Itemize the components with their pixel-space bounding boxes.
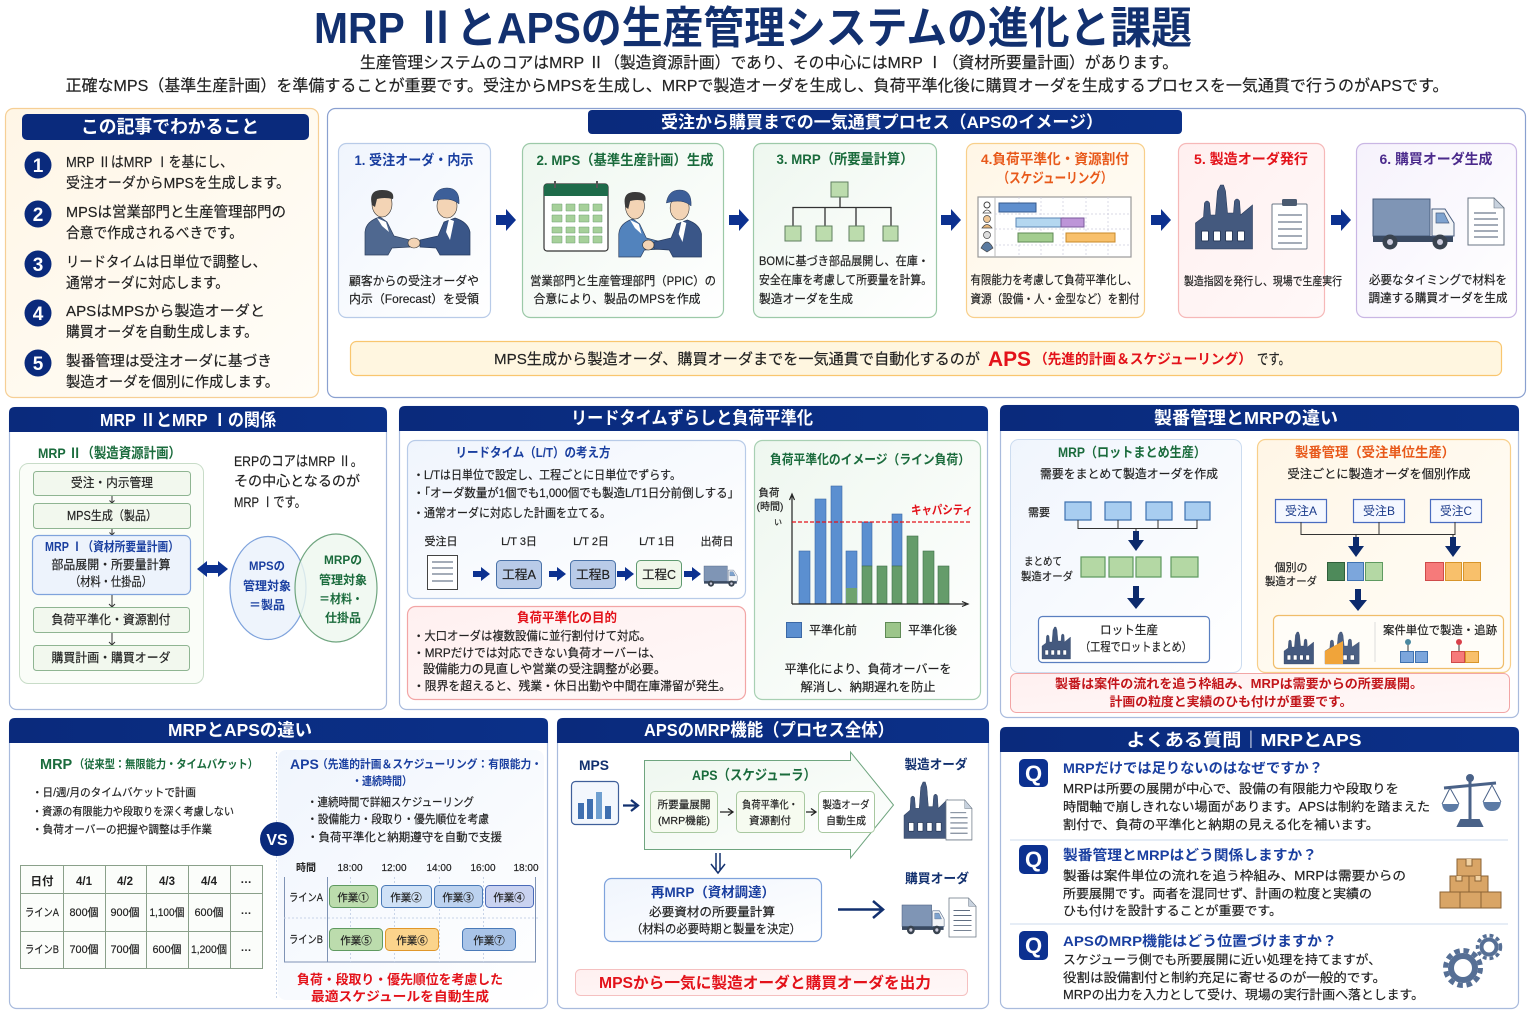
timeline: 工程B	[576, 567, 610, 582]
callout: 製番: 製番は案件の流れを追う枠組み、MRPは需要からの所要展開。	[1055, 676, 1423, 691]
block arrow: APS scheduler: 所要量展開	[658, 798, 710, 811]
icon: document	[1468, 198, 1504, 245]
heading: 一気通貫プロセス	[588, 110, 1182, 134]
box: MRP I: 部品展開・所要量計算	[52, 557, 170, 572]
column: APS: 負荷・段取り・優先順位を考慮した	[297, 972, 503, 987]
item 5: 5	[33, 354, 44, 375]
panel: APSのMRP機能: 製造オーダ	[904, 757, 968, 772]
heading	[1000, 727, 1519, 752]
box: 製番管理: 受注ごとに製造オーダを個別作成	[1288, 466, 1470, 481]
venn: MPS / MRP	[230, 534, 377, 642]
panel: MRPとAPSの違い	[9, 718, 548, 1008]
card 2: MPS生成	[522, 144, 724, 318]
FAQ 2: 所要展開です。両者を混同せず、計画の粒度と実績の	[1063, 886, 1372, 901]
banner: APS: （先進的計画＆スケジューリング）	[1034, 351, 1252, 367]
stack: MRP II: 負荷平準化・資源割付	[52, 612, 170, 627]
icon: factory + document	[904, 782, 972, 840]
timeline	[424, 535, 737, 590]
card 1: 受注オーダ・内示: 1. 受注オーダ・内示	[354, 152, 474, 168]
box: 製番管理: 製造オーダ	[1265, 574, 1317, 588]
item 3: 3	[33, 255, 43, 276]
venn: MPS / MRP: MPSの	[249, 559, 285, 573]
note: ERP: その中心となるのが	[234, 473, 360, 489]
box: MRP I: MRP Ⅰ（資材所要量計画）	[45, 539, 179, 554]
panel: APSのMRP機能	[557, 718, 989, 1008]
block arrow: APS scheduler: 資源割付	[749, 814, 791, 827]
gantt chart: 作業③	[442, 891, 474, 904]
icon: calendar	[544, 181, 608, 251]
column: APS: ・連続時間）	[352, 774, 412, 788]
card 6: 購買オーダ生成: 必要なタイミングで材料を	[1369, 273, 1507, 287]
box: 製番管理: 受注A	[1285, 504, 1317, 518]
bar chart: (時間)	[757, 501, 783, 513]
panel: APSのMRP機能: MPS	[579, 758, 609, 773]
table	[20, 865, 263, 969]
card 2: MPS生成: 2. MPS（基準生産計画）生成	[536, 152, 714, 168]
card 4: 負荷平準化: 資源（設備・人・金型など）を割付	[970, 292, 1140, 306]
card 5: 製造オーダ発行: 製造指図を発行し、現場で生産実行	[1184, 274, 1342, 288]
column: MRP: （従来型：無限能力・タイムバケット）	[74, 757, 258, 771]
FAQ 2: 製番管理とMRPはどう関係しますか？	[1063, 847, 1317, 863]
bar chart: 負荷	[758, 487, 780, 499]
arrow: down	[711, 853, 725, 873]
subtitle: 正確なMPS（基準生産計画）を準備することが重要です。受注からMPSを生成し、MRPで製造オーダを生成し、負荷平準化後に購買オーダを生成するプロセスを一気通貫で行うのがAPSです。	[66, 77, 1448, 95]
venn: MPS / MRP: 管理対象	[319, 572, 367, 587]
icon: handshake	[365, 188, 470, 255]
callout	[576, 970, 968, 996]
gantt chart: ラインA	[289, 892, 324, 904]
timeline: 受注日	[424, 535, 458, 548]
item 1: 1	[33, 156, 44, 177]
FAQ 1: MRPは所要の展開が中心で、設備の有限能力や段取りを	[1063, 781, 1399, 796]
gantt chart	[284, 861, 539, 962]
box: MRP I: （材料・仕掛品）	[70, 574, 152, 589]
arrow	[729, 209, 749, 231]
icon: truck + document	[902, 898, 976, 937]
heading: 一気通貫プロセス: 受注から購買までの一気通貫プロセス（APSのイメージ）	[661, 113, 1103, 132]
legend	[786, 622, 958, 638]
column: APS: APS	[290, 756, 319, 772]
bar chart: キャパシティ	[911, 503, 973, 517]
table: 4/4	[201, 876, 218, 888]
card 2: MPS生成: 合意により、製品のMPSを作成	[534, 292, 700, 306]
FAQ 2	[1010, 845, 1508, 924]
card 6: 購買オーダ生成: 調達する購買オーダを生成	[1368, 290, 1508, 305]
banner: APS: APS	[988, 348, 1031, 371]
column: APS: ・負荷平準化と納期遵守を自動で支援	[307, 830, 502, 844]
timeline: 工程C	[642, 567, 676, 582]
item 4: APSはMPSから製造オーダと	[66, 303, 265, 320]
arrow	[496, 209, 516, 231]
item 3: リードタイムは日単位で調整し、	[66, 254, 266, 271]
table: ラインA	[25, 907, 60, 919]
card 3: MRP: BOMに基づき部品展開し、在庫・	[759, 254, 929, 268]
panel: MRP IIとMRP Iの関係	[9, 407, 387, 710]
column: APS: ・連続時間で詳細スケジューリング	[307, 795, 474, 809]
box: L/T: ・L/Tは日単位で設定し、工程ごとに日単位でずらす。	[413, 467, 681, 482]
table: 4/2	[117, 876, 133, 888]
panel: 一気通貫プロセス	[328, 108, 1526, 398]
box: 負荷平準化の目的: 設備能力の見直しや営業の受注調整が必要。	[423, 661, 666, 676]
box: 負荷平準化のイメージ: 解消し、納期遅れを防止	[800, 679, 936, 694]
heading	[9, 407, 387, 432]
stack: MRP II	[20, 464, 204, 684]
FAQ 1: MRPだけでは足りないのはなぜですか？	[1063, 760, 1323, 776]
box: 製番管理: 製番管理（受注単位生産）	[1295, 444, 1455, 460]
heading: この記事でわかること	[22, 114, 309, 140]
table: 600個	[152, 943, 182, 956]
item 2: 合意で作成されるべきです。	[66, 225, 243, 242]
box: 負荷平準化の目的: ・大口オーダは複数設備に並行割付けて対応。	[413, 628, 651, 643]
timeline: L/T 3日	[501, 536, 537, 548]
callout: MPSから一気に製造オーダと購買オーダを出力	[599, 973, 931, 992]
gantt chart: 作業④	[493, 891, 525, 904]
gantt chart: 作業②	[390, 891, 422, 904]
icon: boxes	[1440, 859, 1501, 908]
card 2: MPS生成: 営業部門と生産管理部門（PPIC）の	[530, 273, 716, 288]
table: 1,100個	[150, 906, 184, 919]
box: 再MRP: 再MRP（資材調達）	[651, 884, 775, 900]
banner: APS: MPS生成から製造オーダ、購買オーダまでを一気通貫で自動化するのが	[494, 351, 980, 368]
venn: MPS / MRP: ＝製品	[249, 597, 285, 612]
arrow	[1151, 209, 1171, 231]
box: ロット生産: ロット生産	[1100, 623, 1158, 637]
column: APS: 最適スケジュールを自動生成	[311, 989, 489, 1004]
gantt chart: 作業⑦	[473, 934, 505, 947]
box: L/T: ・通常オーダに対応した計画を立てる。	[413, 505, 611, 520]
icon: MPS chart	[572, 782, 618, 824]
gantt chart: 18:00	[513, 863, 539, 874]
box: 製番管理: 受注B	[1363, 504, 1395, 518]
timeline: L/T 2日	[573, 536, 609, 548]
block arrow: APS scheduler: 負荷平準化・	[742, 798, 798, 811]
callout: 製番: 計画の粒度と実績のひも付けが重要です。	[1110, 694, 1352, 709]
FAQ 3: 役割は設備割付と制約充足に寄せるのが一般的です。	[1063, 970, 1386, 985]
column: MRP: ・負荷オーバーの把握や調整は手作業	[32, 822, 212, 836]
timeline: 出荷日	[700, 535, 734, 548]
item 5: 製番管理は受注オーダに基づき	[66, 352, 272, 370]
icon: truck	[1373, 199, 1454, 250]
item 5: 製造オーダを個別に作成します。	[66, 374, 279, 391]
note: ERP: MRP Ⅰです。	[234, 494, 306, 510]
item 3: 通常オーダに対応します。	[66, 275, 229, 292]
FAQ 3: スケジューラ側でも所要展開に近い処理を持てますが、	[1063, 952, 1381, 967]
box: 負荷平準化の目的: 負荷平準化の目的	[517, 610, 617, 625]
panel: よくある質問	[1000, 727, 1519, 1008]
heading	[1000, 405, 1519, 431]
card 5: 製造オーダ発行: 5. 製造オーダ発行	[1194, 151, 1308, 167]
badge: VS	[260, 822, 294, 856]
item 1: 受注オーダからMPSを生成します。	[66, 175, 290, 192]
panel: MRP IIとMRP Iの関係: MRP Ⅱ（製造資源計画）	[38, 445, 181, 461]
box: 再MRP	[604, 878, 822, 942]
icon: gears	[1446, 936, 1500, 986]
heading: リードタイムずらしと負荷平準化	[571, 408, 813, 428]
box: MRP lot: まとめて	[1024, 555, 1062, 568]
block arrow: APS scheduler: 製造オーダ	[822, 798, 870, 811]
table: 1,200個	[191, 943, 227, 956]
card 6: 購買オーダ生成	[1356, 144, 1516, 318]
card 4: 負荷平準化: 有限能力を考慮して負荷平準化し、	[970, 272, 1138, 287]
table: 700個	[70, 943, 98, 956]
timeline: 工程A	[502, 567, 537, 582]
heading	[399, 406, 988, 431]
gantt chart: 12:00	[381, 863, 407, 874]
bar chart: い	[774, 518, 782, 527]
gantt chart: 作業①	[337, 891, 369, 904]
card 6: 購買オーダ生成: 6. 購買オーダ生成	[1380, 151, 1492, 167]
panel: この記事でわかること	[6, 108, 318, 398]
box: L/T	[408, 440, 746, 598]
box: MRP lot: 需要	[1028, 506, 1050, 519]
note: ERP	[234, 453, 363, 510]
table: 4/1	[76, 876, 93, 888]
table: 900個	[110, 906, 140, 919]
item 2: 2	[33, 205, 43, 226]
FAQ 1: Q	[1025, 761, 1042, 786]
item 4: 購買オーダを自動生成します。	[66, 324, 258, 341]
box: ロット生産: （工程でロットまとめ）	[1080, 639, 1192, 654]
icon: BOM tree	[785, 182, 898, 241]
FAQ 1	[1010, 759, 1508, 840]
venn: MPS / MRP: 仕掛品	[325, 610, 361, 625]
item 2: MPSは営業部門と生産管理部門の	[66, 203, 286, 221]
block arrow: APS scheduler: 自動生成	[826, 814, 866, 827]
table: 800個	[70, 906, 98, 919]
box: 再MRP: （材料の必要時期と製量を決定）	[631, 922, 801, 936]
FAQ 3: APSのMRP機能はどう位置づけますか？	[1063, 933, 1337, 949]
FAQ 1: 割付で、負荷の平準化と納期の見える化を補います。	[1063, 817, 1379, 832]
gantt chart: 16:00	[470, 863, 496, 874]
icon: clipboard	[1272, 199, 1307, 249]
venn: MPS / MRP: ＝材料・	[319, 591, 363, 606]
heading: MRPとAPSの違い	[168, 720, 312, 740]
box: MRP lot: MRP（ロットまとめ生産）	[1058, 444, 1206, 460]
venn: MPS / MRP: 管理対象	[243, 578, 291, 593]
box: 負荷平準化の目的	[408, 606, 746, 700]
block arrow: APS scheduler	[644, 752, 894, 858]
box: 負荷平準化の目的: ・MRPだけでは対応できない負荷オーバーは、	[413, 646, 661, 660]
box: MRP lot	[1010, 440, 1242, 672]
heading	[557, 718, 989, 743]
item 1: MRP ⅡはMRP Ⅰを基にし、	[66, 154, 233, 171]
bar chart	[757, 486, 973, 606]
gantt chart: 作業⑥	[396, 934, 428, 947]
column: MRP	[20, 757, 263, 969]
card 3: MRP: 安全在庫を考慮して所要量を計算。	[759, 272, 932, 287]
venn: MPS / MRP: MRPの	[324, 553, 362, 567]
card 1: 受注オーダ・内示	[338, 144, 490, 318]
note: ERP: ERPのコアはMRP Ⅱ。	[234, 453, 363, 469]
card 1: 受注オーダ・内示: 顧客からの受注オーダや	[349, 273, 479, 288]
FAQ 3: MRPの出力を入力として受け、現場の実行計画へ落とします。	[1063, 987, 1424, 1002]
gantt chart: 14:00	[426, 863, 452, 874]
column: APS: （先進的計画＆スケジューリング：有限能力・	[317, 757, 542, 771]
icon: scales	[1442, 775, 1501, 826]
box: 再MRP: 必要資材の所要量計算	[649, 904, 775, 919]
table: …	[240, 942, 252, 954]
legend: 平準化前	[809, 623, 857, 637]
box: 案件単位	[1274, 616, 1504, 668]
heading: 製番管理とMRPの違い	[1154, 408, 1338, 428]
gantt chart: 18:00	[337, 863, 363, 874]
item 4	[24, 300, 265, 341]
FAQ 3	[1019, 931, 1500, 1002]
table: …	[240, 874, 252, 886]
card 3: MRP: 3. MRP（所要量計算）	[776, 151, 914, 167]
box: MRP I	[32, 536, 190, 594]
FAQ 2: ひも付けを設計することが重要です。	[1063, 903, 1282, 918]
banner: APS	[350, 342, 1502, 376]
stack: MRP II: 受注・内示管理	[71, 475, 153, 490]
panel: リードタイムずらしと負荷平準化	[399, 406, 988, 710]
box: 製番管理: 受注C	[1440, 504, 1472, 518]
arrow	[838, 901, 883, 918]
block arrow: APS scheduler: APS（スケジューラ）	[692, 767, 816, 783]
heading: APSのMRP機能（プロセス全体）	[644, 720, 894, 740]
box: 製番管理	[1258, 440, 1510, 672]
arrow	[1331, 209, 1351, 231]
badge: VS: VS	[266, 832, 288, 849]
card 4: 負荷平準化: （スケジューリング）	[998, 170, 1112, 186]
card 4: 負荷平準化	[966, 144, 1144, 318]
icon: gantt	[978, 197, 1131, 257]
subtitle: 生産管理システムのコアはMRP Ⅱ（製造資源計画）であり、その中心にはMRP Ⅰ（資材所要量計画）があります。	[360, 54, 1178, 72]
callout: 製番	[1010, 674, 1510, 712]
box: 案件単位: 案件単位で製造・追跡	[1383, 623, 1497, 637]
FAQ 1: 時間軸で崩しきれない場面があります。APSは制約を踏まえた	[1063, 799, 1430, 814]
item 2	[24, 200, 286, 242]
box: 負荷平準化のイメージ: 負荷平準化のイメージ（ライン負荷）	[770, 452, 970, 467]
table: ラインB	[25, 944, 59, 956]
box: L/T: リードタイム（L/T）の考え方	[456, 445, 610, 460]
column: MRP: MRP	[40, 757, 73, 773]
column: MRP: ・資源の有限能力や段取りを深く考慮しない	[32, 804, 234, 818]
box: 製番管理: 個別の	[1274, 561, 1308, 574]
panel: APSのMRP機能: 購買オーダ	[905, 871, 969, 886]
table: 700個	[110, 943, 140, 956]
gantt chart: 時間	[296, 861, 316, 874]
item 1	[24, 152, 290, 192]
timeline: L/T 1日	[639, 536, 675, 548]
box: ロット生産	[1038, 616, 1210, 662]
icon: handshake	[619, 190, 702, 257]
box: MRP lot: 製造オーダ	[1021, 569, 1073, 583]
arrow: double	[197, 561, 228, 577]
stack: MRP II: 購買計画・購買オーダ	[52, 650, 170, 665]
arrow	[941, 209, 961, 231]
block arrow: APS scheduler: (MRP機能)	[658, 814, 710, 827]
box: 負荷平準化のイメージ	[754, 440, 980, 700]
card 3: MRP: 製造オーダを生成	[759, 291, 853, 306]
column: MRP: ・日/週/月のタイムバケットで計画	[32, 785, 196, 799]
stack: MRP II: MPS生成（製品）	[67, 509, 157, 523]
subtitle	[66, 54, 1448, 95]
item 5	[24, 350, 279, 391]
gantt chart: ラインB	[289, 934, 323, 946]
box: MRP lot: 需要をまとめて製造オーダを作成	[1040, 466, 1218, 481]
column: APS: ・設備能力・段取り・優先順位を考慮	[307, 812, 489, 826]
table: 日付	[30, 874, 54, 888]
arrow	[623, 800, 638, 811]
card 3: MRP	[754, 144, 936, 318]
FAQ 2: Q	[1025, 847, 1042, 872]
box: 負荷平準化のイメージ: 平準化により、負荷オーバーを	[784, 661, 952, 676]
FAQ 3: Q	[1025, 933, 1042, 958]
legend: 平準化後	[908, 623, 958, 637]
heading	[9, 718, 548, 743]
item 4: 4	[33, 304, 44, 325]
panel: 製番管理とMRPの違い	[1000, 405, 1519, 718]
banner: APS: です。	[1257, 351, 1290, 368]
heading: MRP ⅡとMRP Ⅰの関係	[100, 410, 276, 430]
FAQ 2: 製番は案件単位の流れを追う枠組み、MRPは需要からの	[1063, 868, 1406, 883]
item 3	[24, 250, 266, 292]
card 5: 製造オーダ発行	[1178, 144, 1342, 318]
box: L/T: ・「オーダ数量が1個でも1,000個でも製造L/T1日分前倒しする」	[413, 485, 739, 500]
table: …	[240, 905, 252, 917]
card 4: 負荷平準化: 4.負荷平準化・資源割付	[981, 151, 1129, 167]
heading: この記事でわかること: この記事でわかること	[81, 117, 259, 137]
box: 負荷平準化の目的: ・限界を超えると、残業・休日出勤や中間在庫滞留が発生。	[413, 678, 731, 693]
gantt chart: 作業⑤	[340, 934, 372, 947]
column: APS	[276, 750, 544, 1004]
table: 4/3	[159, 876, 175, 888]
card 1: 受注オーダ・内示: 内示（Forecast）を受領	[349, 292, 479, 306]
table: 600個	[194, 906, 224, 919]
icon: factory	[1196, 185, 1252, 249]
heading: よくある質問｜MRPとAPS	[1126, 730, 1362, 750]
title: MRP ⅡとAPSの生産管理システムの進化と課題	[314, 4, 1192, 53]
